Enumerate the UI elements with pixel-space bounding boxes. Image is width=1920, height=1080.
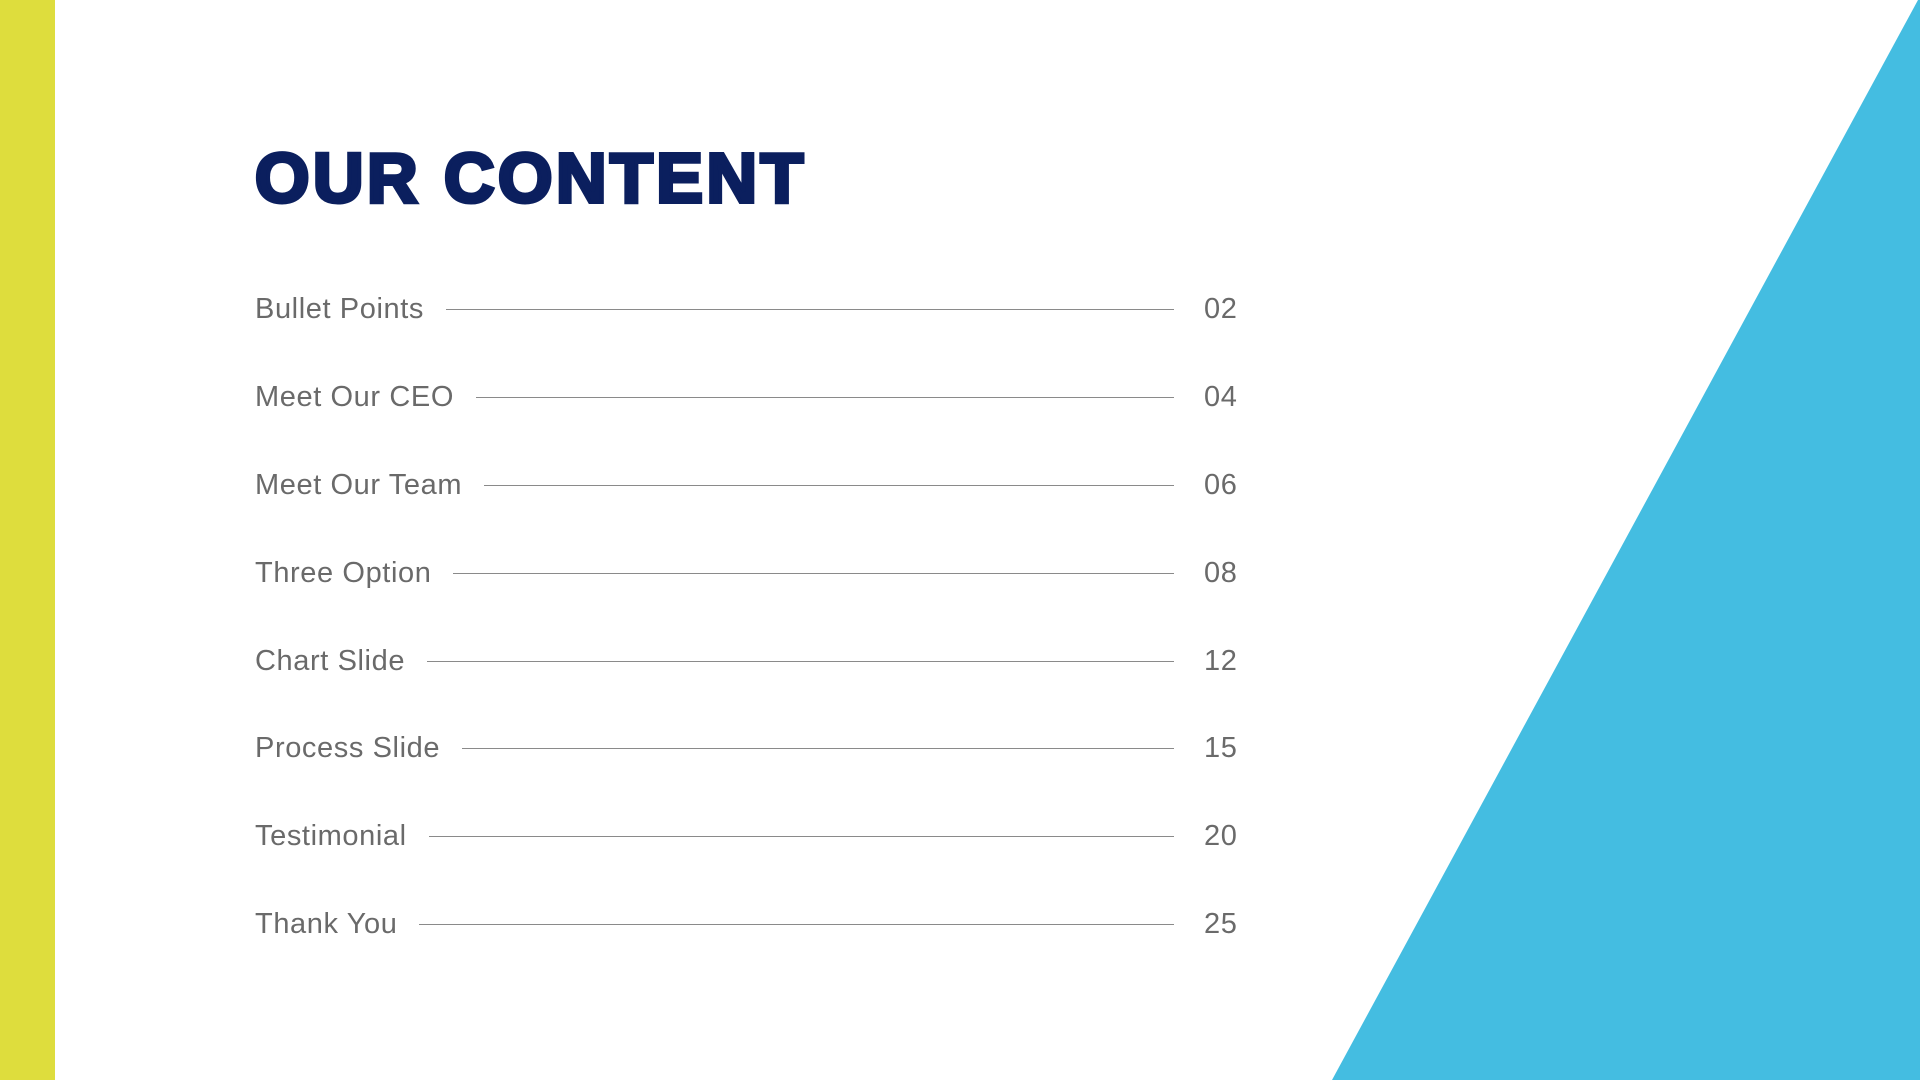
row: Three Option: 08 xyxy=(1204,556,1237,588)
row: Three Option xyxy=(255,556,1237,588)
row: Meet Our CEO: 04 xyxy=(1204,380,1237,412)
row: Bullet Points: Bullet Points xyxy=(255,292,424,324)
row: Process Slide: Process Slide xyxy=(255,732,440,764)
row: Chart Slide: 12 xyxy=(1204,644,1237,676)
row: Meet Our Team: Meet Our Team xyxy=(255,468,462,500)
row: Thank You xyxy=(255,908,1237,940)
row: Meet Our CEO xyxy=(255,380,1237,412)
list: table of contents xyxy=(255,292,1237,940)
row: Meet Our CEO: Meet Our CEO xyxy=(255,380,454,412)
row: Meet Our Team: 06 xyxy=(1204,468,1237,500)
row: Three Option: Three Option xyxy=(255,556,431,588)
row: Testimonial xyxy=(255,820,1237,852)
row: Bullet Points xyxy=(255,292,1237,324)
accent bar xyxy=(0,0,55,1080)
row: Bullet Points: 02 xyxy=(1204,292,1237,324)
row: Testimonial: 20 xyxy=(1204,820,1237,852)
row: Chart Slide xyxy=(255,644,1237,676)
row: Process Slide: 15 xyxy=(1204,732,1237,764)
row: Thank You: 25 xyxy=(1204,908,1237,940)
row: Process Slide xyxy=(255,732,1237,764)
row: Meet Our Team xyxy=(255,468,1237,500)
row: Testimonial: Testimonial xyxy=(255,820,407,852)
title: OUR CONTENT xyxy=(255,139,807,217)
row: Thank You: Thank You xyxy=(255,908,397,940)
row: Chart Slide: Chart Slide xyxy=(255,644,405,676)
